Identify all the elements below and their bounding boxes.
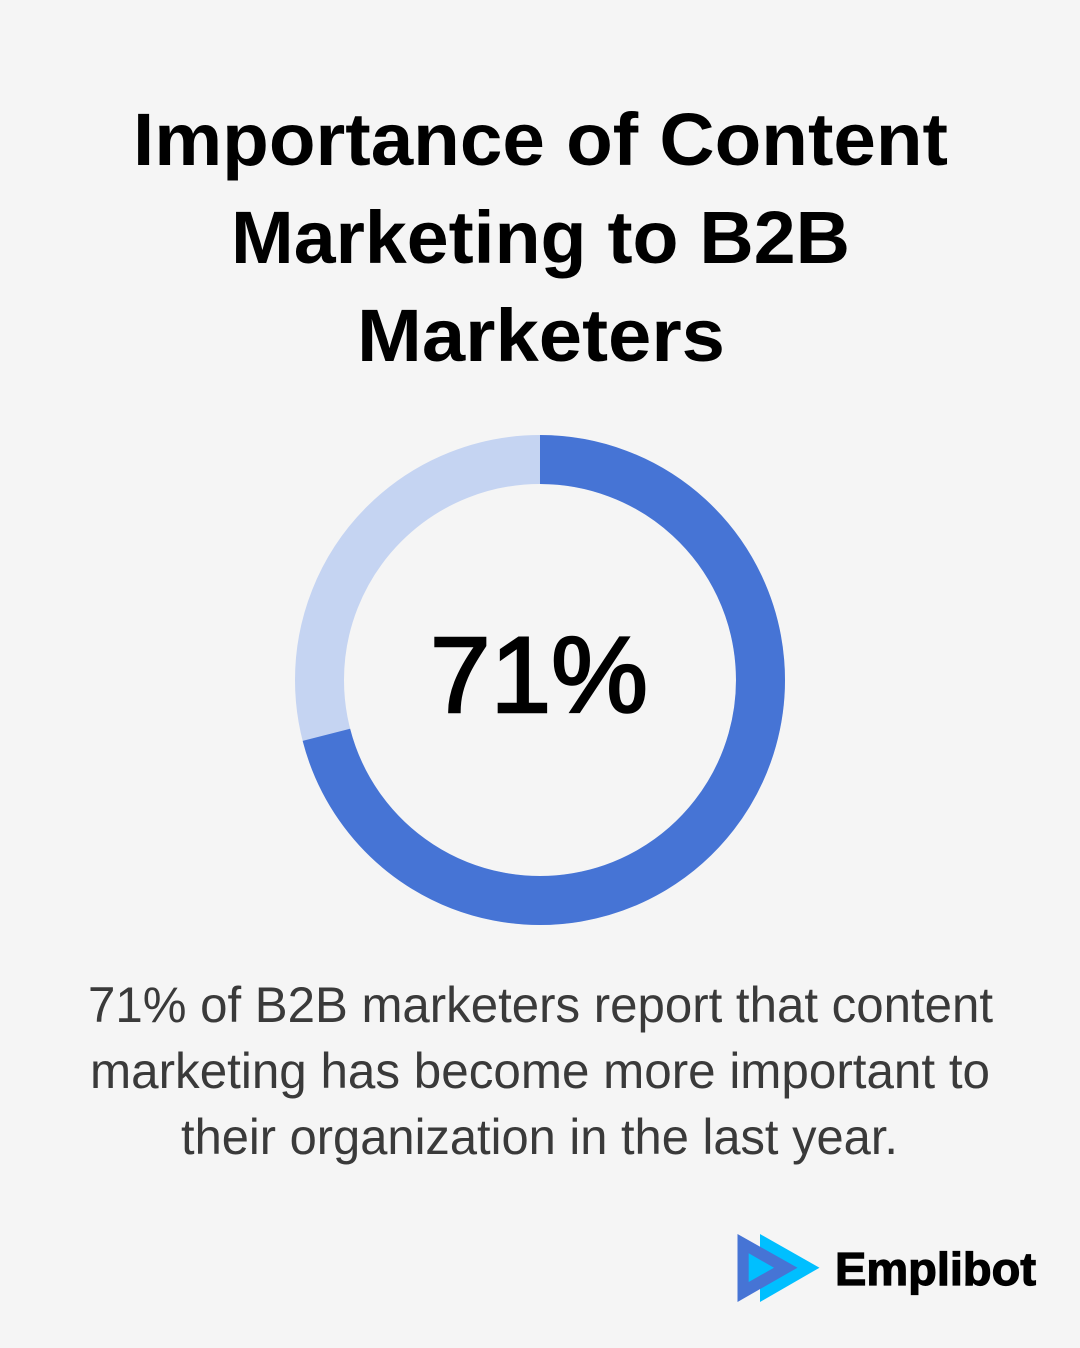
logo: Emplibot <box>738 1234 1036 1302</box>
donut chart: 71% <box>320 460 760 900</box>
description text: their organization in the last year. <box>181 1109 898 1165</box>
title: Marketers <box>357 294 725 377</box>
title: Marketing to B2B <box>231 196 850 279</box>
icon: play triangles <box>738 1234 820 1302</box>
title: Importance of Content <box>133 98 948 181</box>
title <box>133 98 948 377</box>
description text <box>88 977 993 1165</box>
donut center value: 71% <box>430 614 648 735</box>
logo wordmark: Emplibot <box>835 1243 1036 1295</box>
description text: marketing has become more important to <box>90 1043 990 1099</box>
description text: 71% of B2B marketers report that content <box>88 977 993 1033</box>
